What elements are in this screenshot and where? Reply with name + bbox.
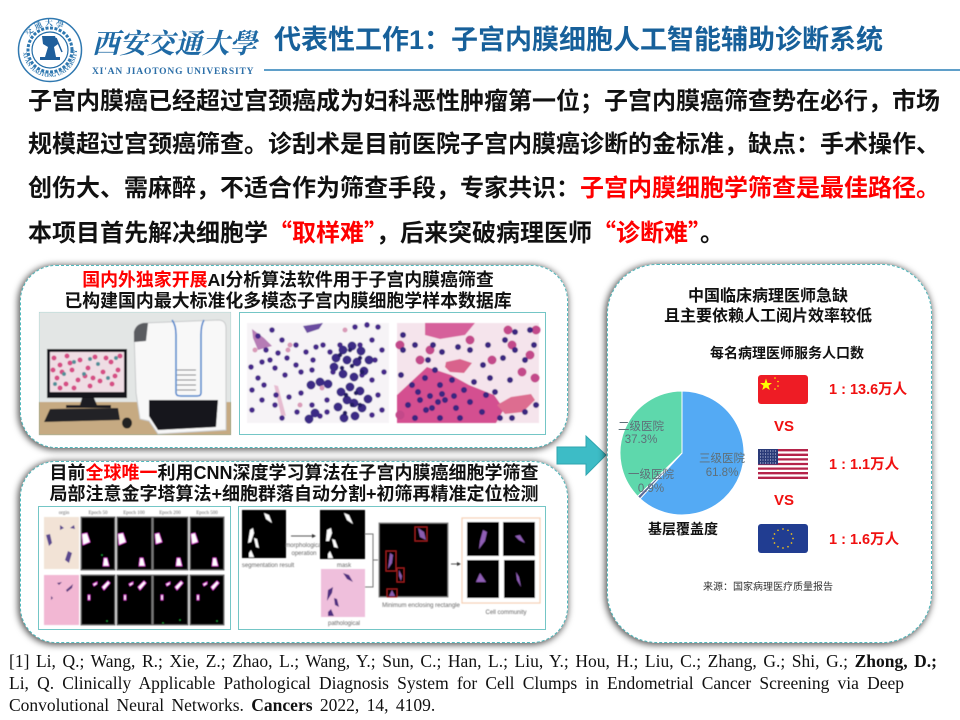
- text block: background introduction: 子宫内膜癌已经超过宫颈癌成为妇科恶性肿瘤第一位；子宫内膜癌筛查势在必行，市场: [28, 88, 940, 115]
- vs label: VS: [774, 418, 794, 435]
- panel: AI analysis software: [20, 265, 568, 448]
- logo wordmark: XI'AN JIAOTONG UNIVERSITY: [92, 67, 254, 77]
- image box: workstation photo: [39, 312, 231, 435]
- cytology sample 1: [246, 322, 388, 422]
- pie label: secondary hospitals: 37.3%: [625, 434, 657, 446]
- citation: [9, 651, 937, 715]
- pathological: pathological: [327, 620, 360, 626]
- mask: [320, 510, 364, 568]
- panel heading: CNN method: 局部注意金字塔算法+细胞群落自动分割+初筛再精准定位检测: [49, 484, 539, 504]
- pie caption: 基层覆盖度: [648, 521, 718, 537]
- subheading: population per pathologist: 每名病理医师服务人口数: [710, 345, 864, 361]
- panel heading: pathologist shortage: 中国临床病理医师急缺: [688, 288, 848, 305]
- minimum enclosing rectangle: Minimum enclosing rectangle: [382, 602, 460, 608]
- citation: Li, Q. Clinically Applicable Pathological Diagnosis System for Cell Clumps in Endometrial Cancer Screening via Deep: [9, 673, 904, 693]
- ratio: EU: 1 : 1.6万人: [829, 532, 899, 548]
- image box: epoch comparison grid: Epoch 50: [88, 510, 108, 516]
- minimum enclosing rectangle: [378, 522, 460, 608]
- arrow: morphological operation: [285, 534, 322, 556]
- title: 代表性工作1：子宫内膜细胞人工智能辅助诊断系统: [274, 25, 883, 55]
- citation: Convolutional Neural Networks. Cancers 2022, 14, 4109.: [9, 695, 435, 715]
- image box: epoch comparison grid: Epoch 100: [123, 510, 145, 516]
- citation: [1] Li, Q.; Wang, R.; Xie, Z.; Zhao, L.; Wang, Y.; Sun, C.; Han, L.; Liu, Y.; Hou, H.; Liu, C.; Zhang, G.; Shi, G.; Zhong, D.;: [9, 651, 937, 671]
- arrow: morphological operation: operation: [291, 550, 316, 556]
- segmentation result: [241, 510, 294, 568]
- panel heading: CNN method: 目前全球唯一利用CNN深度学习算法在子宫内膜癌细胞学筛查: [50, 463, 538, 483]
- arrow: panels to shortage panel: [556, 435, 607, 476]
- panel heading: software and database: 已构建国内最大标准化多模态子宫内膜细胞学样本数据库: [64, 291, 512, 311]
- logo: Xi'an Jiaotong University seal: [18, 18, 82, 82]
- image box: epoch comparison grid: Epoch 500: [196, 510, 218, 516]
- panel: CNN deep learning algorithm: [20, 461, 568, 643]
- text block: background introduction: 创伤大、需麻醉，不适合作为筛查手段，专家共识：子宫内膜细胞学筛查是最佳路径。: [28, 175, 940, 202]
- arrow to cell community: [450, 562, 460, 566]
- text block: background introduction: 规模超过宫颈癌筛查。诊刮术是目前医院子宫内膜癌诊断的金标准，缺点：手术操作、: [28, 131, 940, 158]
- panel heading: software and database: [64, 270, 512, 311]
- image box: cytology samples: [239, 312, 546, 435]
- flag: USA: [758, 449, 808, 479]
- text block: background introduction: [28, 88, 940, 248]
- title underline: [264, 69, 960, 71]
- segmentation result: segmentation result: [241, 562, 294, 568]
- cytology sample 2: [396, 322, 538, 422]
- logo wordmark: 西安交通大學: [92, 21, 257, 61]
- logo: Xi'an Jiaotong University seal: 交 通 大 學: [24, 19, 64, 37]
- image box: epoch comparison grid: [38, 506, 231, 630]
- mask: mask: [336, 562, 352, 568]
- cell community: [462, 518, 540, 616]
- panel: pathologist shortage: [607, 264, 932, 643]
- panel heading: CNN method: [49, 463, 539, 504]
- image box: epoch comparison grid: Epoch 200: [159, 510, 181, 516]
- panel heading: pathologist shortage: 且主要依赖人工阅片效率较低: [664, 308, 872, 325]
- pie label: tertiary hospitals: 三级医院: [699, 451, 745, 465]
- source note: 来源：国家病理医疗质量报告: [703, 582, 833, 593]
- pie label: primary hospitals: 一级医院: [628, 467, 674, 481]
- connector to bounding step: [364, 534, 378, 586]
- pie label: secondary hospitals: 二级医院: [618, 419, 664, 433]
- image box: segmentation pipeline: [238, 506, 546, 630]
- flag: EU: [758, 524, 808, 553]
- logo: Xi'an Jiaotong University seal: XI'AN JIAOTONG UNIVERSITY: [23, 50, 78, 77]
- text block: background introduction: 本项目首先解决细胞学“取样难”，后来突破病理医师“诊断难”。: [28, 213, 724, 248]
- pie label: tertiary hospitals: 61.8%: [706, 467, 738, 479]
- ratio: USA: 1 : 1.1万人: [829, 457, 899, 473]
- arrow: morphological operation: morphological: [285, 542, 322, 548]
- image box: epoch comparison grid: orgin: [58, 510, 69, 516]
- flag: China: [758, 375, 808, 404]
- vs label: VS: [774, 492, 794, 509]
- pie label: primary hospitals: 0.9%: [638, 483, 664, 495]
- panel heading: software and database: 国内外独家开展AI分析算法软件用于子宫内膜癌筛查: [82, 270, 494, 290]
- panel heading: pathologist shortage: [664, 287, 872, 325]
- pathological: [320, 568, 364, 626]
- cell community: Cell community: [485, 610, 526, 616]
- pie chart: hospital coverage: [618, 392, 745, 514]
- ratio: China: 1 : 13.6万人: [829, 382, 907, 398]
